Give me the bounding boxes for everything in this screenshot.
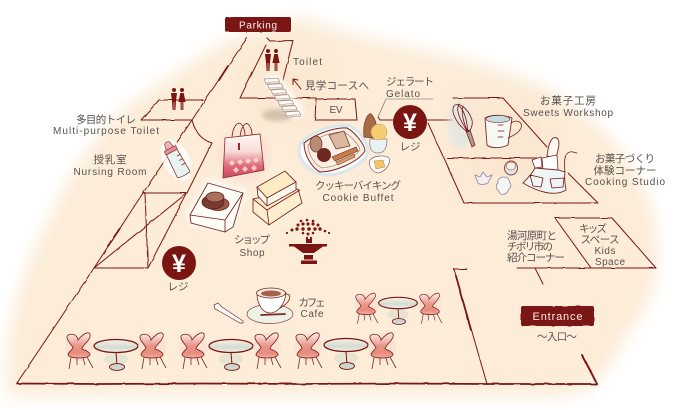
label: multi-purpose toilet	[53, 113, 159, 137]
label: kids space: Space	[595, 257, 625, 268]
label: local corner	[507, 230, 565, 264]
icon: cookie cutters	[475, 161, 518, 194]
icon: multi-purpose toilet	[171, 88, 186, 110]
icon: apron	[523, 138, 577, 193]
label: entrance japanese: ～入口～	[537, 331, 578, 343]
icon: cookie box	[186, 178, 248, 232]
icon: toilet	[265, 49, 280, 71]
icon: shopping bag	[218, 123, 270, 184]
tag: entrance	[521, 306, 594, 326]
label: sweets workshop: Sweets Workshop	[523, 108, 613, 119]
icon: yen register right	[393, 105, 427, 139]
label: kids space: Kids	[594, 246, 616, 257]
label: shop	[234, 234, 270, 259]
label: cookie buffet: Cookie Buffet	[322, 193, 394, 204]
label: sweets workshop: お菓子工房	[540, 95, 596, 107]
icon: baby bottle	[154, 134, 198, 186]
tag: parking: Parking	[239, 20, 277, 32]
label: shop: Shop	[240, 248, 265, 259]
label: cookie buffet	[315, 179, 402, 204]
label: gelato	[378, 76, 434, 117]
label: gelato: ジェラート	[386, 76, 434, 88]
label: shop: ショップ	[234, 234, 270, 246]
label: nursing room	[74, 153, 146, 178]
cafe furniture: front row	[65, 333, 396, 370]
icon: yen register left	[162, 246, 196, 280]
icon: gelato	[364, 114, 387, 153]
label: multi-purpose toilet: 多目的トイレ	[76, 113, 136, 126]
label: register right: レジ	[400, 141, 420, 153]
label: cafe	[298, 297, 326, 320]
floor plan walls	[17, 38, 656, 384]
label: cooking studio: お菓子づくり	[595, 153, 655, 165]
label: local corner: 湯河原町と	[507, 230, 557, 242]
label: nursing room: 授乳室	[94, 153, 126, 166]
label: cooking studio	[585, 153, 665, 188]
label: tour route: 見学コースへ	[305, 79, 369, 92]
label: multi-purpose toilet: Multi-purpose Toilet	[53, 126, 159, 137]
icon: stacked cake boxes	[248, 165, 308, 232]
label: local corner: 紹介コーナー	[507, 251, 565, 264]
cafe furniture: back row	[354, 293, 442, 324]
arrow: tour route	[293, 79, 301, 89]
label: cooking studio: 体験コーナー	[594, 164, 656, 177]
label: cafe: Cafe	[300, 309, 324, 320]
label: cooking studio: Cooking Studio	[585, 177, 665, 188]
label: nursing room: Nursing Room	[74, 167, 146, 178]
icon: coffee cup	[247, 288, 293, 324]
icon: yen register right: ¥	[403, 109, 417, 137]
icon: measuring jug	[485, 115, 521, 148]
label: sweets workshop	[523, 95, 613, 119]
icon: stairs	[262, 74, 306, 121]
label: gelato: Gelato	[386, 89, 420, 100]
label: cookie buffet: クッキーバイキング	[315, 179, 402, 192]
label: local corner: チボリ市の	[507, 240, 553, 253]
icon: small dish	[369, 156, 389, 173]
tag: entrance: Entrance	[532, 311, 582, 323]
icon: yen register left: ¥	[172, 250, 186, 278]
label: toilet: Toilet	[293, 57, 322, 68]
label: EV: EV	[330, 105, 343, 116]
label: cafe: カフェ	[298, 297, 326, 309]
tag: parking	[225, 17, 291, 32]
label: kids space	[579, 222, 625, 268]
logo: tree on bowl	[286, 219, 330, 264]
label: register left: レジ	[168, 281, 188, 293]
icon: whisk	[448, 101, 475, 149]
label: kids space: キッズ	[579, 222, 607, 235]
icon: fork	[214, 303, 243, 323]
icon: cookie plate	[299, 126, 368, 175]
label: kids space: スペース	[580, 234, 620, 246]
